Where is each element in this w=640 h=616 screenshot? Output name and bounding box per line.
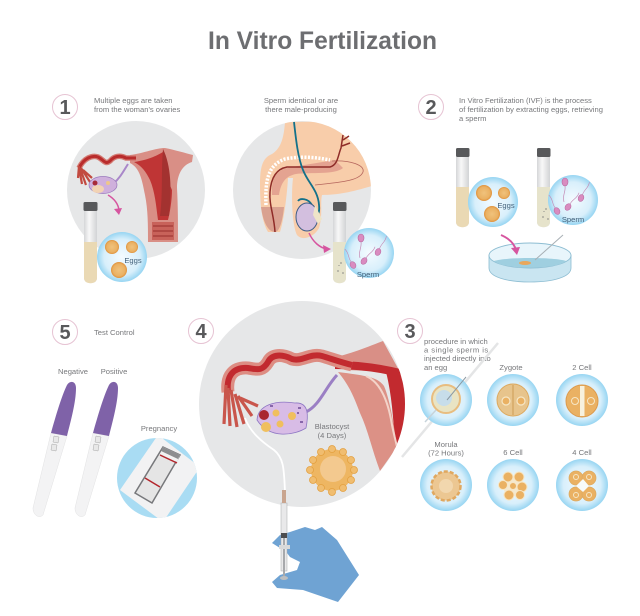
sperm bubble [546, 175, 598, 225]
morula label: Morula [434, 440, 458, 449]
blastocyst label: Blastocyst [315, 422, 349, 431]
panel: implantation [199, 301, 420, 602]
step 1 sperm text: there male-producing [265, 105, 337, 114]
panel: morula [420, 459, 472, 511]
step 4 badge: 4 [195, 321, 207, 343]
arrow [309, 233, 331, 253]
hand [272, 527, 359, 602]
negative label: Negative [58, 367, 88, 376]
ligament [306, 375, 337, 412]
step 5 badge: 5 [59, 322, 71, 344]
ovary [89, 176, 117, 194]
positive test stick [75, 382, 118, 517]
panel: 2 cell [556, 374, 608, 426]
blastocyst label: (4 Days) [318, 431, 347, 440]
pregnancy magnifier [117, 438, 197, 518]
step 3 badge: 3 [404, 321, 416, 343]
morula label: (72 Hours) [428, 448, 464, 458]
panel: male anatomy [233, 121, 394, 283]
fallopian tube [79, 156, 136, 168]
panel: female anatomy egg retrieval [67, 121, 205, 283]
6 cell label: 6 Cell [503, 448, 523, 457]
corpus [272, 160, 343, 195]
fimbriae [224, 385, 258, 427]
zygote label: Zygote [499, 363, 523, 372]
negative test stick [33, 382, 76, 517]
step 3 text: procedure in which [424, 337, 488, 346]
step 5 badge [52, 320, 78, 344]
sperm bubble: Sperm [357, 270, 379, 279]
step 4 badge [188, 318, 214, 344]
step 3 text: injected directly into [424, 354, 491, 363]
step 3 text: a single sperm is [424, 346, 489, 354]
white dashes [266, 157, 330, 205]
eggs bubble [468, 177, 518, 227]
panel: 6 cell [487, 459, 539, 511]
bladder outline [315, 161, 363, 185]
body [260, 121, 372, 238]
urethra [270, 135, 350, 232]
panel: injection embryo [420, 374, 472, 426]
sperm tube [537, 148, 550, 227]
eggs bubble [97, 232, 147, 282]
uterus [130, 148, 193, 242]
uterus [335, 341, 405, 471]
step 1 text: from the woman's ovaries [94, 105, 180, 114]
egg tube [456, 148, 470, 227]
blastocyst [306, 446, 358, 496]
catheter [245, 418, 285, 492]
vas deferens [294, 122, 319, 214]
step 1 badge [52, 94, 78, 120]
arrow [501, 235, 520, 255]
step 1 sperm text: Sperm identical or are [264, 96, 338, 105]
title: In Vitro Fertilization [208, 27, 437, 55]
step 5 text: Test Control [94, 328, 135, 337]
step 2 badge: 2 [425, 97, 437, 119]
step 2 text: In Vitro Fertilization (IVF) is the process [459, 96, 592, 105]
petri dish [489, 235, 571, 282]
2 cell label: 2 Cell [572, 363, 592, 372]
ovary [257, 402, 307, 434]
step 2 text: a sperm [459, 114, 486, 123]
glans [261, 207, 284, 232]
step 1 badge: 1 [59, 97, 71, 119]
syringe [279, 490, 290, 580]
ligament [113, 164, 128, 184]
step 2 text: of fertilization by extracting eggs, retrieving [459, 105, 603, 114]
arrow [108, 195, 122, 215]
step 3 badge [398, 318, 422, 344]
injection needle glow [402, 343, 498, 457]
panel: 4 cell [556, 459, 608, 511]
fimbriae [78, 166, 92, 185]
sperm bubble: Sperm [562, 215, 584, 224]
4 cell label: 4 Cell [572, 448, 592, 457]
positive label: Positive [101, 367, 127, 376]
testis [296, 203, 322, 231]
test tube with eggs [84, 202, 98, 283]
pregnancy label: Pregnancy [141, 424, 177, 433]
step 3 text: an egg [424, 363, 447, 372]
fallopian tube [228, 355, 352, 392]
sperm bubble [342, 228, 394, 279]
panel: lab tubes and dish [456, 148, 598, 282]
eggs bubble: Eggs [124, 256, 142, 265]
test tube with sperm [333, 202, 346, 283]
panel: zygote [487, 374, 539, 426]
step 2 badge [418, 94, 444, 120]
eggs bubble: Eggs [497, 201, 515, 210]
step 1 text: Multiple eggs are taken [94, 96, 173, 105]
